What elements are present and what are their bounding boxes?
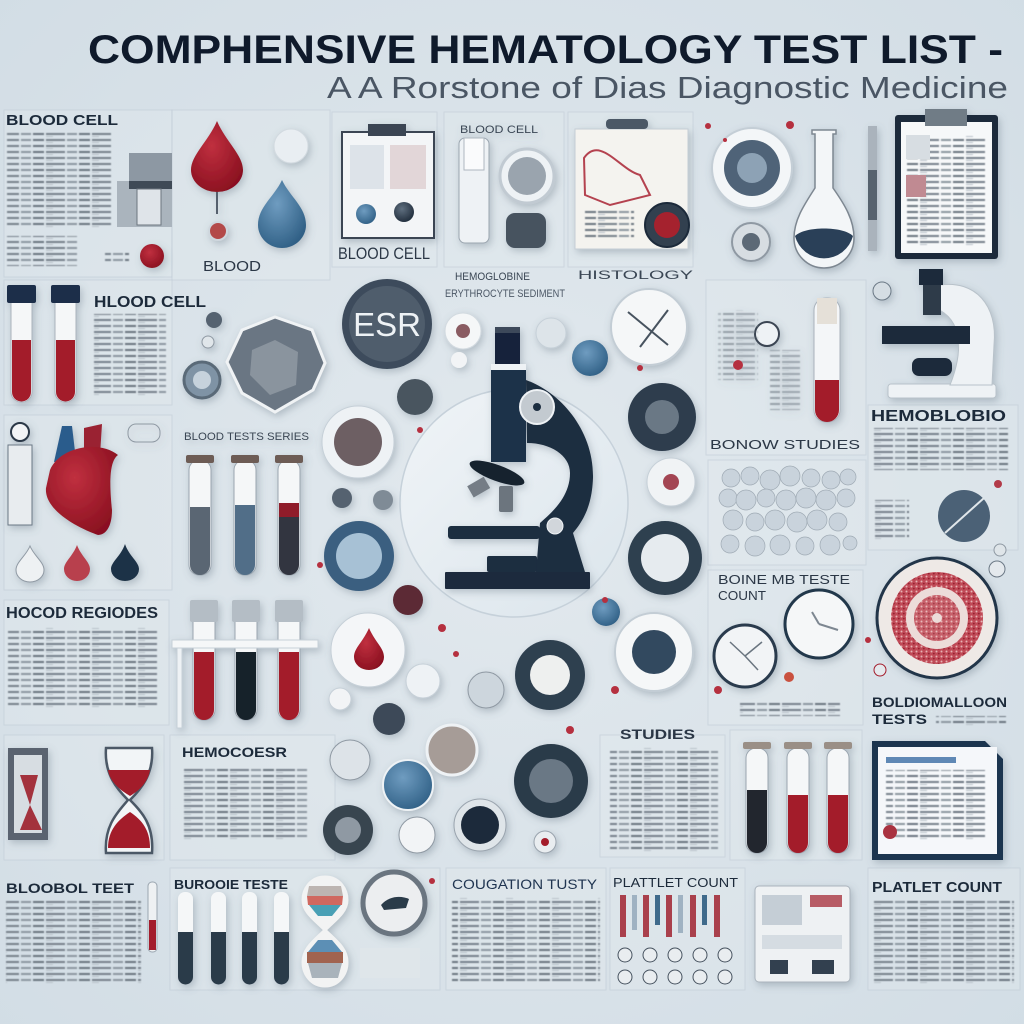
icon: analyzer device bbox=[755, 886, 850, 982]
panel: clipboard with charts bbox=[342, 124, 434, 238]
panel: upper headings: ERYTHROCYTE SEDIMENT bbox=[445, 288, 565, 300]
panel: platelet count chart: PLATTLET COUNT bbox=[613, 875, 738, 890]
icon: ESR badge bbox=[342, 279, 432, 369]
icon: lens dial and flask bbox=[712, 126, 877, 268]
icon: hexagon badge bbox=[184, 312, 325, 412]
panel: blood test text: BLOOBOL TEET bbox=[6, 880, 135, 896]
panel: bone marrow tests text: BOLDIOMALLOON bbox=[872, 694, 1007, 710]
panel: blood procedures text: HOCOD REGIODES bbox=[6, 605, 158, 622]
icons: small badges around microscope bbox=[322, 289, 702, 855]
icon: right microscope bbox=[873, 269, 996, 398]
panel: hemoglobin text bbox=[871, 408, 1008, 556]
panel: bone marrow studies bbox=[710, 437, 860, 556]
panel: blood cell text: HLOOD CELL bbox=[94, 294, 206, 311]
panel: studies text: STUDIES bbox=[620, 726, 695, 742]
panel: bone marrow tests text: TESTS bbox=[872, 711, 927, 727]
test tubes: rack bbox=[172, 600, 318, 728]
panel: bone marrow test count and clocks bbox=[714, 572, 853, 687]
panel: clipboard report bbox=[895, 109, 998, 259]
center lens bbox=[400, 389, 628, 617]
panel: histology gauge and tube bbox=[718, 298, 840, 422]
panel: upper headings bbox=[445, 268, 693, 300]
panel: bone marrow tests text bbox=[740, 694, 1007, 727]
panel: platelet count chart bbox=[613, 875, 738, 984]
panel: platelet count text bbox=[872, 879, 1014, 984]
panel: top-left blood cell text bbox=[6, 112, 129, 266]
label: blood: BLOOD bbox=[203, 258, 261, 275]
panel: heart and drops bbox=[8, 423, 160, 582]
icon: ESR badge: ESR bbox=[353, 306, 421, 343]
icon: red and blue blood drops bbox=[140, 121, 308, 268]
panel: bone marrow studies: BONOW STUDIES bbox=[710, 437, 860, 452]
panel: coagulation tests: COUGATION TUSTY bbox=[452, 876, 598, 892]
panel: hemoglobin text: HEMOBLOBIO bbox=[871, 408, 1006, 425]
decorative red dots bbox=[317, 121, 871, 734]
test tubes: top left bbox=[7, 285, 80, 402]
panel: top-left image block bbox=[117, 153, 172, 227]
panel: blood test text bbox=[6, 880, 157, 985]
panel: bone marrow test count and clocks: BOINE MB TESTE bbox=[718, 572, 850, 587]
title: COMPHENSIVE HEMATOLOGY TEST LIST - bbox=[88, 28, 1003, 72]
panel: coagulation tests bbox=[452, 876, 600, 982]
icon: hourglass panel bbox=[8, 748, 152, 853]
icon: central microscope bbox=[445, 327, 593, 589]
panel: blood procedures text bbox=[6, 605, 158, 708]
panel: upper headings: HISTOLOGY bbox=[578, 268, 693, 282]
panel: report document bbox=[872, 741, 1003, 860]
panel: top-left blood cell text: BLOOD CELL bbox=[6, 112, 118, 129]
panel: platelet count text: PLATLET COUNT bbox=[872, 879, 1002, 896]
icon: blood smear dish bbox=[874, 558, 1005, 678]
test tubes: middle: BLOOD TESTS SERIES bbox=[184, 431, 309, 443]
test tubes: middle bbox=[184, 431, 309, 575]
panel: bottom tubes and helix: BUROOIE TESTE bbox=[174, 877, 288, 892]
panel: graph document bbox=[575, 119, 689, 249]
panel: blood cell sample: BLOOD CELL bbox=[460, 124, 538, 136]
panel: upper headings: HEMOGLOBINE bbox=[455, 271, 530, 283]
panel: blood cell sample bbox=[459, 124, 554, 248]
test tubes: bottom right bbox=[743, 742, 852, 853]
panel: studies text bbox=[610, 726, 718, 852]
subtitle: A A Rorstone of Dias Diagnostic Medicine bbox=[327, 70, 1008, 105]
panel: bottom tubes and helix bbox=[174, 872, 435, 986]
label: blood cell: BLOOD CELL bbox=[338, 244, 430, 263]
panel: hemocoder text: HEMOCOESR bbox=[182, 744, 287, 760]
panel: blood cell text bbox=[94, 294, 206, 396]
panel: bone marrow test count and clocks: COUNT bbox=[718, 588, 766, 603]
panel: hemocoder text bbox=[182, 744, 307, 840]
